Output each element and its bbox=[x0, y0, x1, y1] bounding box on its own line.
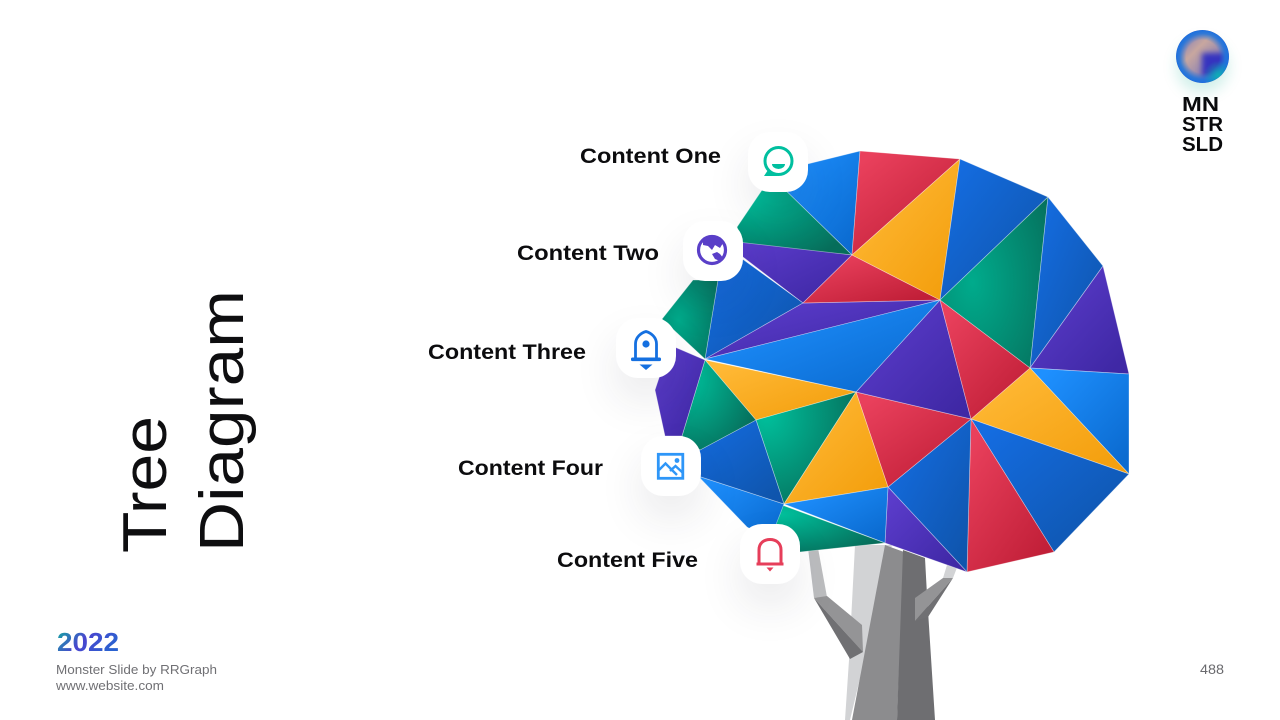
label: Content One: Content One bbox=[580, 144, 721, 168]
footer credits: www.website.com bbox=[55, 678, 164, 693]
card: content three icon bbox=[616, 318, 676, 378]
label: Content Three: Content Three bbox=[428, 340, 586, 364]
logo wordmark: STR bbox=[1182, 114, 1224, 136]
title: Tree bbox=[111, 416, 180, 553]
label: Content Five: Content Five bbox=[557, 548, 698, 572]
footer credits bbox=[55, 662, 217, 693]
polygon tree crown bbox=[655, 151, 1129, 572]
logo wordmark: SLD bbox=[1182, 134, 1223, 156]
title: Diagram bbox=[188, 290, 257, 552]
label: Content Two: Content Two bbox=[517, 241, 659, 265]
icon: rocket bell bbox=[631, 330, 661, 370]
icon: bell bbox=[756, 538, 784, 572]
logo sphere bbox=[1176, 30, 1229, 83]
year: 2022 bbox=[57, 629, 119, 657]
card: content two icon bbox=[683, 221, 743, 281]
icon: picture bbox=[656, 452, 684, 480]
card: content four icon bbox=[641, 436, 701, 496]
trunk and branches bbox=[808, 545, 958, 720]
label: Content Four: Content Four bbox=[458, 456, 604, 480]
icon: chat bubble bbox=[764, 146, 794, 176]
logo wordmark: MN bbox=[1182, 94, 1219, 116]
icon: globe bbox=[696, 234, 728, 266]
card: content five icon bbox=[740, 524, 800, 584]
card: content one icon bbox=[748, 132, 808, 192]
page number: 488 bbox=[1200, 661, 1224, 677]
footer credits: Monster Slide by RRGraph bbox=[56, 662, 217, 677]
title bbox=[111, 290, 257, 553]
logo wordmark bbox=[1182, 94, 1224, 156]
